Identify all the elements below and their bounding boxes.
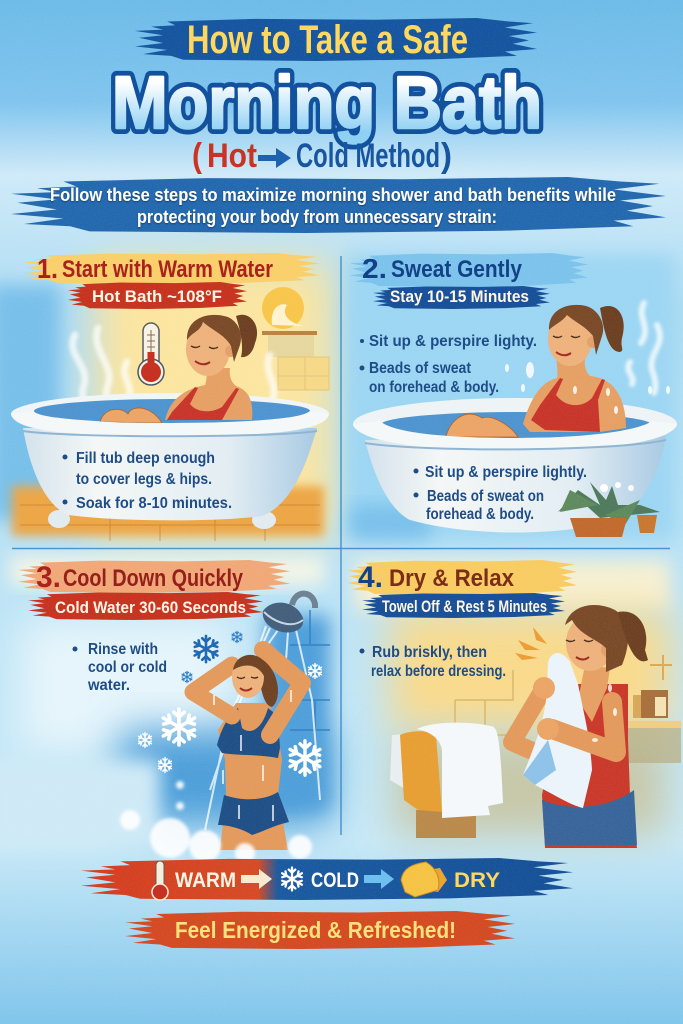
text: instructions [360, 644, 506, 680]
icon: snowflake [280, 868, 304, 890]
text: instructions: Soak for 8-10 minutes. [76, 495, 232, 512]
text: lower instructions [414, 464, 587, 523]
text: instructions: cool or cold [88, 659, 167, 676]
main title: Morning Bath [112, 61, 542, 144]
subtitle: hot to cold method: Hot [207, 137, 257, 175]
title banner: How to Take a Safe [187, 18, 468, 62]
towels [390, 723, 503, 838]
snowflakes [138, 631, 322, 775]
wall decor: sun and shelf [262, 287, 329, 390]
sweat drops [505, 362, 670, 406]
panel 2: sweat gently [350, 253, 677, 537]
panel backgrounds [0, 255, 675, 850]
subheading [68, 282, 247, 309]
shower head [263, 594, 315, 632]
text: lower instructions: forehead & body. [426, 506, 534, 523]
text: instructions: Rinse with [88, 641, 158, 658]
text: instructions [72, 641, 167, 694]
text: instructions: relax before dressing. [371, 663, 506, 680]
bathtub front [353, 421, 677, 533]
banner: warm cold dry: WARM [175, 869, 236, 892]
heading: Dry & Relax [389, 565, 515, 592]
heading: 3. [36, 561, 61, 594]
splash [120, 781, 312, 863]
banner: warm cold dry: DRY [454, 869, 500, 892]
text: instructions: Fill tub deep enough [76, 450, 215, 467]
subheading [362, 593, 565, 618]
bathtub back rim [353, 398, 677, 450]
subtitle: hot to cold method: Cold Method [296, 137, 440, 175]
subheading: Towel Off & Rest 5 Minutes [382, 597, 547, 616]
main title: Morning Bath [112, 61, 542, 144]
text: instructions: Rub briskly, then [372, 644, 487, 661]
heading [347, 560, 577, 595]
arrow [258, 148, 291, 168]
heading: Cool Down Quickly [63, 565, 244, 592]
thermometer [138, 323, 164, 385]
subtitle: hot to cold method: ( [192, 137, 203, 175]
heading: Sweat Gently [391, 256, 523, 283]
woman [193, 650, 302, 850]
woman [512, 605, 648, 848]
intro banner: Follow these steps to maximize morning shower and bath benefits while [50, 185, 616, 205]
panel 3: cool down quickly [18, 560, 330, 863]
wall tiles and shelf [455, 655, 681, 763]
banner: warm cold dry: COLD [311, 869, 359, 892]
water [34, 399, 310, 423]
heading [350, 253, 588, 287]
heading: 4. [358, 561, 383, 594]
woman [446, 305, 626, 437]
subheading: Cold Water 30-60 Seconds [55, 598, 246, 617]
steam [73, 328, 274, 412]
woman [100, 315, 257, 423]
subheading: Stay 10-15 Minutes [390, 287, 529, 306]
text: instructions: to cover legs & hips. [76, 471, 212, 488]
steam [628, 303, 660, 393]
floor tiles [12, 486, 324, 541]
text: upper instructions [360, 333, 537, 396]
plant [558, 482, 660, 537]
subtitle: hot to cold method [192, 137, 452, 175]
text: lower instructions: Beads of sweat on [427, 488, 544, 505]
water [380, 412, 652, 438]
text: lower instructions: Sit up & perspire lightly. [425, 464, 587, 481]
bathtub front [11, 411, 329, 529]
subheading [28, 592, 263, 620]
panel 1: start with warm water [11, 253, 329, 541]
banner: feel energized: Feel Energized & Refreshed! [175, 917, 456, 943]
subtitle: hot to cold method: ) [441, 137, 452, 175]
intro banner: protecting your body from unnecessary strain: [137, 207, 497, 227]
subheading: Hot Bath ~108°F [92, 287, 222, 306]
bathtub back rim [11, 393, 329, 435]
icon: thermometer [152, 861, 168, 900]
text: upper instructions: Beads of sweat [369, 360, 472, 377]
icon: folded towel [401, 862, 447, 897]
text: upper instructions: on forehead & body. [369, 379, 499, 396]
arrow [241, 869, 272, 889]
text: upper instructions: Sit up & perspire lighty. [369, 333, 537, 350]
arrow [364, 869, 394, 889]
intro banner [11, 177, 666, 233]
text: instructions [62, 450, 232, 512]
text: instructions: water. [87, 677, 130, 694]
heading: Start with Warm Water [62, 256, 273, 283]
motion rays [515, 627, 547, 660]
banner: warm cold dry [81, 858, 573, 900]
heading: 2. [362, 253, 387, 284]
wall tiles [290, 610, 330, 730]
heading: 1. [37, 253, 58, 284]
panel 4: dry and relax [347, 560, 681, 848]
water spray [205, 626, 320, 830]
banner: feel energized [125, 911, 515, 949]
heading [18, 560, 290, 594]
